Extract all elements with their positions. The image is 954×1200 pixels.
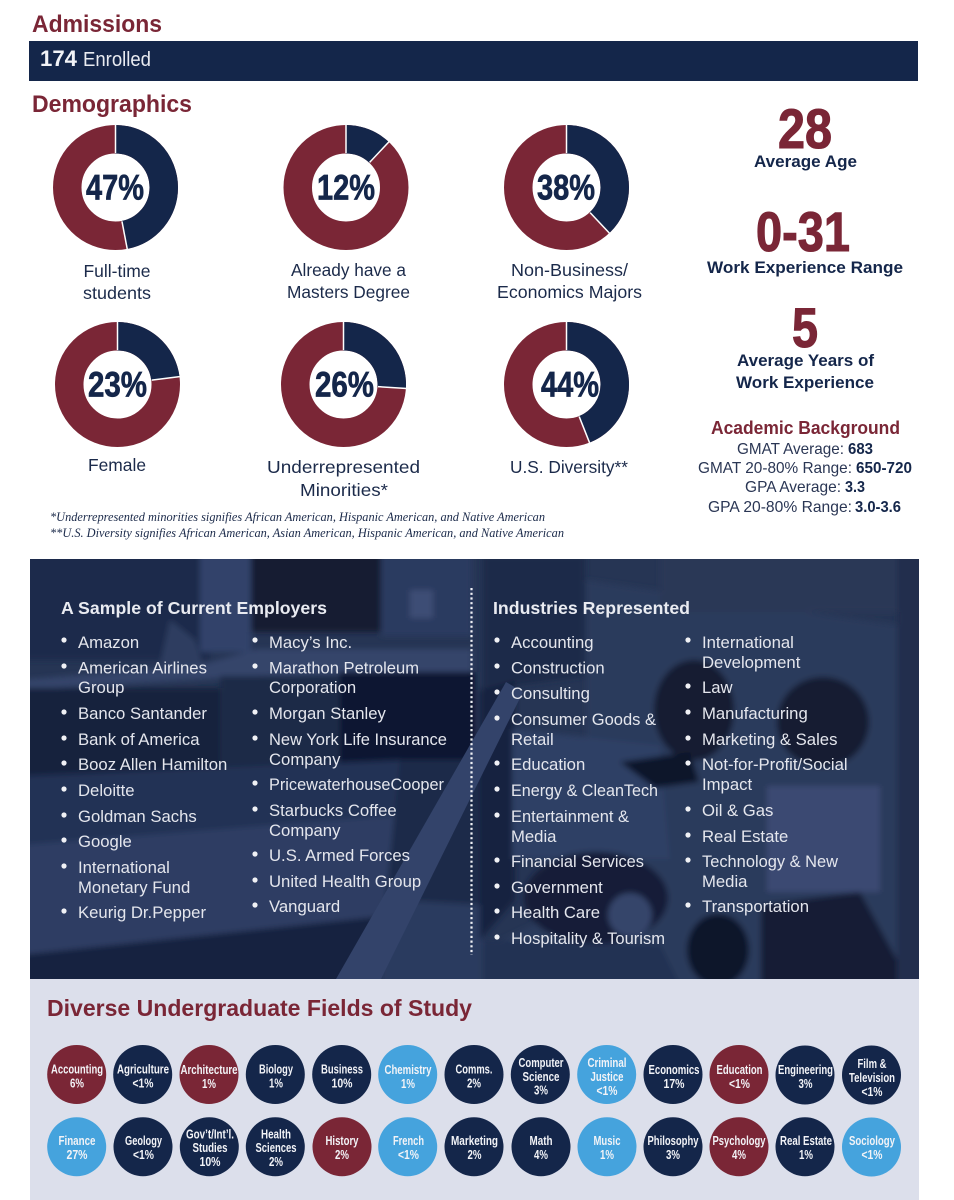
donut: female: 23% — [88, 366, 147, 404]
stat: work experience range: Work Experience Range — [707, 258, 903, 277]
bubble: Music — [578, 1117, 636, 1176]
footnotes: **U.S. Diversity signifies African American, Asian American, Hispanic American, and Native American — [50, 526, 564, 540]
bubble: Gov't/Int'l. Studies — [180, 1117, 239, 1176]
list: industries represented: Financial Services — [511, 852, 644, 871]
bubble: Sociology: <1% — [862, 1148, 882, 1162]
stat: average age: 28 — [778, 97, 832, 160]
list: current employers: U.S. Armed Forces — [269, 846, 410, 865]
bubble: Finance — [47, 1117, 106, 1176]
bubble: Business — [312, 1045, 371, 1104]
bubble: Biology: Biology — [259, 1062, 293, 1076]
bubble: Health Sciences: Sciences — [256, 1141, 297, 1155]
list: industries represented: Manufacturing — [702, 704, 808, 723]
bubble: Education — [710, 1045, 768, 1104]
donut: full-time students: Full-time — [84, 261, 150, 281]
heading: fields of study: Diverse Undergraduate Fields of Study — [47, 995, 472, 1021]
bubble: Music: 1% — [600, 1148, 614, 1162]
academic background: 683 — [848, 441, 873, 458]
bubble: Agriculture: Agriculture — [117, 1062, 169, 1076]
list: industries represented: Energy & CleanTech — [511, 781, 658, 800]
bubble: Business: Business — [321, 1062, 363, 1076]
list: industries represented: Marketing & Sales — [702, 730, 837, 749]
bubble: Geology: <1% — [133, 1148, 154, 1162]
bubble: Accounting: Accounting — [51, 1062, 103, 1076]
list: current employers: Company — [269, 750, 341, 769]
donut: masters degree: 12% — [317, 168, 375, 208]
bubble: Criminal Justice: <1% — [596, 1084, 618, 1098]
list: industries represented: Transportation — [702, 897, 809, 916]
list: industries represented: Retail — [511, 730, 554, 749]
bubble: Architecture: 1% — [202, 1077, 216, 1091]
heading: Admissions: Admissions — [32, 11, 162, 38]
bubble: Finance: Finance — [58, 1134, 96, 1148]
list: industries represented: Hospitality & Tourism — [511, 929, 665, 948]
bubble: Film & Television: Film & — [858, 1057, 886, 1071]
bubble: Film & Television — [842, 1046, 901, 1104]
bubble: Film & Television: <1% — [862, 1085, 882, 1099]
bubble: Architecture: Architecture — [180, 1063, 238, 1077]
bubble: Criminal Justice — [577, 1045, 636, 1104]
bubble: Chemistry: 1% — [401, 1077, 415, 1091]
stat: average age — [754, 97, 857, 171]
bubble: Accounting — [47, 1045, 106, 1104]
donut: masters degree: Already have a — [291, 260, 406, 280]
bubble: Gov't/Int'l. Studies: Studies — [192, 1141, 228, 1155]
enrolled bar: 174 — [40, 46, 78, 71]
list: current employers: Group — [78, 678, 124, 697]
bubble: Gov't/Int'l. Studies: Gov’t/Int’l. — [186, 1128, 234, 1142]
stat: average years of work experience: Average Years of — [737, 351, 874, 370]
academic background: 650-720 — [856, 460, 912, 477]
list: current employers: Macy’s Inc. — [269, 633, 352, 652]
list: current employers: American Airlines — [78, 658, 207, 678]
bubble: Philosophy: Philosophy — [648, 1134, 699, 1148]
academic background — [698, 418, 912, 516]
bubble: Marketing — [444, 1117, 504, 1176]
bubble: Education: <1% — [729, 1077, 750, 1091]
bubble: French: <1% — [398, 1148, 419, 1162]
list: current employers: Marathon Petroleum — [269, 658, 419, 678]
donut: US diversity: U.S. Diversity** — [510, 457, 628, 477]
donut: full-time students — [67, 124, 164, 303]
donut: female: Female — [88, 455, 146, 475]
bubble: Philosophy: 3% — [666, 1148, 680, 1162]
bubble: Marketing: Marketing — [451, 1134, 498, 1148]
stat: average years of work experience — [736, 296, 874, 392]
bubble: Health Sciences — [246, 1117, 305, 1176]
bubble: Criminal Justice: Justice — [590, 1070, 624, 1084]
bubble: Finance: 27% — [66, 1148, 88, 1162]
list: industries represented: Consumer Goods & — [511, 710, 656, 729]
stat: average years of work experience: Work Experience — [736, 373, 874, 392]
donut: non-business majors: 38% — [537, 168, 595, 208]
list: current employers: Goldman Sachs — [78, 807, 197, 826]
academic background: 3.0-3.6 — [855, 499, 901, 516]
list: industries represented: Government — [511, 878, 603, 897]
list: industries represented: Health Care — [511, 903, 600, 922]
donut: underrepresented minorities: Underrepresented — [267, 457, 420, 477]
bubble: Psychology — [710, 1117, 768, 1176]
panel: undergraduate fields of study — [30, 979, 919, 1200]
donut: US diversity: 44% — [541, 366, 599, 404]
donut: full-time students: 47% — [86, 168, 144, 208]
stat: average age: Average Age — [754, 152, 857, 171]
academic background: GMAT 20-80% Range: — [698, 460, 852, 477]
list: industries represented: Law — [702, 678, 734, 697]
bubble: History: 2% — [335, 1148, 349, 1162]
list: industries represented: Entertainment & — [511, 807, 629, 826]
list: current employers: Keurig Dr.Pepper — [78, 903, 206, 922]
bubble: Chemistry: Chemistry — [384, 1063, 432, 1077]
bubble: Psychology: 4% — [732, 1148, 746, 1162]
bubble: Math: Math — [530, 1134, 552, 1148]
donut: full-time students: students — [83, 283, 151, 303]
panel: employers and industries — [20, 550, 927, 990]
heading: Demographics: Demographics — [32, 91, 192, 118]
bubble: Philosophy — [644, 1117, 702, 1176]
bubble: Computer Science: 3% — [534, 1084, 548, 1098]
list: current employers: Banco Santander — [78, 704, 207, 723]
bubble: Economics: Economics — [648, 1063, 700, 1077]
list: current employers: Company — [269, 821, 341, 840]
list: industries represented: Technology & New — [702, 852, 839, 871]
academic background: Academic Background — [711, 418, 900, 438]
stat: average years of work experience: 5 — [792, 296, 818, 359]
donut: underrepresented minorities: 26% — [315, 366, 374, 404]
bubble: Economics: 17% — [664, 1077, 684, 1091]
enrolled bar — [29, 41, 918, 81]
bubble: Computer Science — [511, 1045, 570, 1104]
list: current employers: Vanguard — [269, 897, 340, 916]
list: current employers: International — [78, 858, 170, 877]
list: industries represented: Not-for-Profit/Social — [702, 755, 848, 774]
diagonal beam — [336, 682, 523, 979]
bubble: Accounting: 6% — [70, 1076, 84, 1090]
bubble: Film & Television: Television — [849, 1071, 895, 1085]
bubble: Education: Education — [716, 1063, 762, 1077]
bubble: Psychology: Psychology — [712, 1134, 766, 1148]
bubble: Real Estate — [776, 1117, 834, 1176]
list: current employers: Morgan Stanley — [269, 704, 387, 723]
bubble: Biology — [246, 1045, 305, 1104]
bubble: Sociology: Sociology — [849, 1134, 895, 1148]
donut: non-business majors: Non-Business/ — [511, 260, 628, 280]
academic background: GPA Average: — [745, 479, 841, 496]
academic background: GMAT Average: — [737, 441, 844, 458]
list: industries represented: International — [702, 633, 794, 652]
donut: underrepresented minorities — [267, 321, 420, 500]
enrolled bar: Enrolled — [83, 49, 151, 71]
bubble: Gov't/Int'l. Studies: 10% — [200, 1155, 220, 1169]
list: current employers: Amazon — [78, 633, 139, 652]
list: current employers: Starbucks Coffee — [269, 801, 397, 820]
list: current employers: United Health Group — [269, 872, 421, 891]
bubble: Math: 4% — [534, 1148, 548, 1162]
bubble: History: History — [326, 1134, 359, 1148]
bubble: Real Estate: Real Estate — [780, 1134, 832, 1148]
bubble: Math — [512, 1117, 570, 1176]
bubble: Engineering — [776, 1046, 834, 1104]
bubble: Health Sciences: 2% — [269, 1155, 283, 1169]
donut: non-business majors — [497, 124, 642, 302]
list: industries represented: Real Estate — [702, 827, 788, 846]
bubble: Marketing: 2% — [468, 1148, 482, 1162]
list: industries represented: Media — [511, 827, 557, 846]
bubble: Computer Science: Science — [522, 1070, 560, 1084]
bubble: Comms. — [444, 1045, 504, 1104]
bubble: Geology: Geology — [125, 1134, 162, 1148]
list: industries represented: Oil & Gas — [702, 801, 773, 820]
bubble: Biology: 1% — [269, 1076, 283, 1090]
list: current employers: Deloitte — [78, 781, 135, 800]
bubble: History — [312, 1117, 372, 1176]
bubble: Engineering: Engineering — [778, 1063, 833, 1077]
bubble: Engineering: 3% — [798, 1077, 812, 1091]
panel background photo — [20, 550, 927, 990]
list: industries represented: Construction — [511, 658, 605, 678]
bubble: French — [378, 1117, 437, 1176]
stat: work experience range: 0-31 — [756, 200, 850, 263]
list: industries represented: Industries Represented — [493, 598, 690, 618]
donut: masters degree — [287, 124, 410, 302]
list: industries represented: Impact — [702, 775, 752, 794]
list: industries represented: Development — [702, 653, 801, 672]
bubble: Agriculture: <1% — [132, 1076, 154, 1090]
list: current employers: Corporation — [269, 678, 356, 697]
bubble: Health Sciences: Health — [261, 1128, 291, 1142]
list: current employers — [61, 598, 447, 922]
list: current employers: Booz Allen Hamilton — [78, 755, 227, 774]
bubble: Music: Music — [594, 1134, 621, 1148]
dotted divider — [470, 588, 473, 955]
stat: work experience range — [707, 200, 903, 277]
bubble: Comms.: 2% — [467, 1076, 481, 1090]
list: current employers: A Sample of Current Employers — [61, 598, 327, 618]
bubble: Computer Science: Computer — [518, 1056, 564, 1070]
bubble: Architecture — [180, 1045, 238, 1104]
academic background: 3.3 — [845, 479, 865, 496]
bubble: Sociology — [842, 1118, 901, 1176]
donut: female — [69, 321, 180, 475]
bubble: Criminal Justice: Criminal — [588, 1056, 626, 1070]
list: current employers: PricewaterhouseCooper — [269, 775, 444, 794]
list: current employers: Monetary Fund — [78, 878, 190, 897]
list: current employers: Google — [78, 832, 132, 851]
donut: underrepresented minorities: Minorities* — [300, 480, 388, 500]
donut: US diversity — [510, 321, 628, 477]
list: current employers: Bank of America — [78, 730, 200, 749]
academic background: GPA 20-80% Range: — [708, 499, 852, 516]
donut: non-business majors: Economics Majors — [497, 282, 642, 302]
list: industries represented: Consulting — [511, 684, 590, 703]
list: industries represented: Education — [511, 755, 585, 774]
footnotes: *Underrepresented minorities signifies African American, Hispanic American, and Native American — [50, 510, 545, 524]
bubble: Real Estate: 1% — [799, 1148, 813, 1162]
list: industries represented: Accounting — [511, 633, 594, 652]
bubble: French: French — [393, 1134, 424, 1148]
bubble: Economics — [644, 1045, 702, 1104]
bubble: Agriculture — [113, 1045, 172, 1104]
bubble: Comms.: Comms. — [456, 1062, 492, 1076]
bubble: Chemistry — [378, 1045, 437, 1104]
list: current employers: New York Life Insurance — [269, 730, 447, 749]
donut: masters degree: Masters Degree — [287, 282, 410, 302]
bubble: Geology — [114, 1117, 172, 1176]
list: industries represented: Media — [702, 872, 748, 891]
footnotes — [50, 510, 564, 540]
list: industries represented — [493, 598, 848, 948]
bubble: Business: 10% — [332, 1076, 352, 1090]
